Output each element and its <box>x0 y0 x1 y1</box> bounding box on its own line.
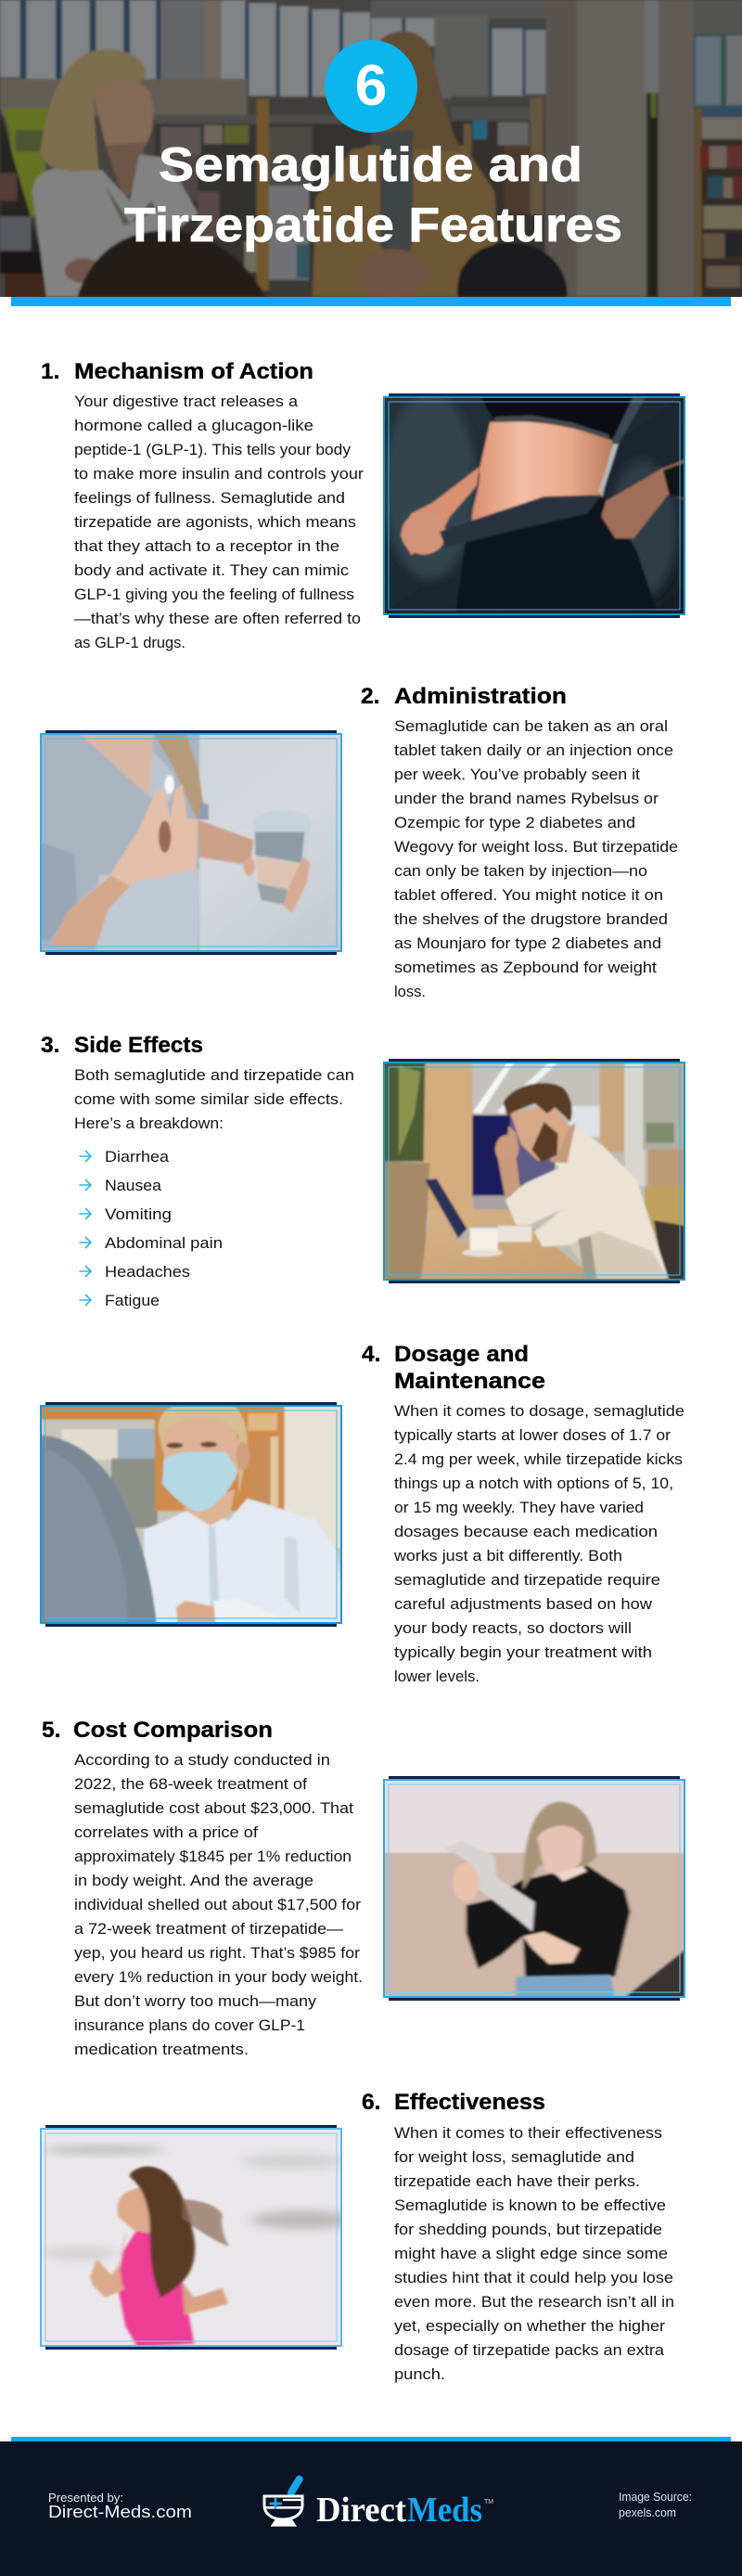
title: Tirzepatide Features <box>124 199 622 252</box>
body text 2: loss. <box>394 983 426 1000</box>
footer accent bar <box>11 2437 731 2441</box>
number badge <box>325 40 417 133</box>
body text 5: approximately $1845 per 1% reduction <box>74 1848 352 1865</box>
body text 4: careful adjustments based on how <box>394 1595 653 1613</box>
body text 5: individual shelled out about $17,500 for <box>74 1896 361 1913</box>
body text 1 <box>74 393 364 651</box>
icon: mortar and pestle logo <box>264 2479 302 2527</box>
body text 3: come with some similar side effects. <box>74 1090 343 1108</box>
heading 6: 6. <box>362 2090 380 2115</box>
photo frame: waist <box>380 393 689 619</box>
body text 6: tirzepatide each have their perks. <box>394 2172 640 2190</box>
body text 1: body and activate it. They can mimic <box>74 561 350 579</box>
heading 4: Maintenance <box>394 1369 545 1394</box>
body text 6: When it comes to their effectiveness <box>394 2124 662 2142</box>
body text 4: semaglutide and tirzepatide require <box>394 1571 660 1589</box>
body text 2: tablet taken daily or an injection once <box>394 741 673 759</box>
bullet list of side effects: Nausea <box>105 1177 162 1194</box>
bullet list of side effects: Abdominal pain <box>105 1234 223 1252</box>
heading 4 <box>362 1342 545 1394</box>
heading 5: 5. <box>42 1718 60 1743</box>
body text 2: sometimes as Zepbound for weight <box>394 959 657 976</box>
heading 3: 3. <box>41 1033 59 1058</box>
body text 6: yet, especially on whether the higher <box>394 2317 665 2335</box>
presented by <box>48 2491 192 2521</box>
body text 5: But don’t worry too much—many <box>74 1992 317 2010</box>
heading 4: 4. <box>362 1342 380 1367</box>
arrow icons <box>80 1151 91 1305</box>
body text 5: semaglutide cost about $23,000. That <box>74 1799 353 1817</box>
body text 5: insurance plans do cover GLP-1 <box>74 2016 305 2034</box>
heading 5: Cost Comparison <box>73 1718 273 1743</box>
body text 2: tablet offered. You might notice it on <box>394 886 663 904</box>
body text 1: hormone called a glucagon-like <box>74 417 313 434</box>
bullet list of side effects: Fatigue <box>105 1292 160 1309</box>
body text 4: or 15 mg weekly. They have varied <box>394 1499 644 1516</box>
body text 4: typically begin your treatment with <box>394 1643 652 1661</box>
body text 6: for shedding pounds, but tirzepatide <box>394 2221 662 2238</box>
bullet list of side effects <box>80 1148 223 1309</box>
photo frame: man with headache <box>380 1059 691 1285</box>
body text 1: Your digestive tract releases a <box>74 393 299 410</box>
body text 4: your body reacts, so doctors will <box>394 1619 632 1637</box>
hero banner photo <box>0 0 742 299</box>
bullet list of side effects: Headaches <box>105 1263 190 1281</box>
body text 3: Here’s a breakdown: <box>74 1114 224 1132</box>
heading 1: Mechanism of Action <box>74 359 313 384</box>
body text 2: the shelves of the drugstore branded <box>394 910 668 928</box>
body text 4: When it comes to dosage, semaglutide <box>394 1402 684 1420</box>
image source: pexels.com <box>619 2506 676 2519</box>
image source <box>619 2491 692 2519</box>
logo wordmark: Meds <box>407 2491 482 2530</box>
body text 6 <box>394 2124 674 2383</box>
title: Semaglutide and <box>159 138 582 192</box>
bullet list of side effects: Diarrhea <box>105 1148 170 1166</box>
section 3: side effects <box>41 1033 691 1309</box>
heading 4: Dosage and <box>394 1342 529 1367</box>
body text 4: works just a bit differently. Both <box>393 1547 622 1565</box>
body text 2: per week. You’ve probably seen it <box>394 766 640 783</box>
photo frame: woman running <box>33 2119 355 2351</box>
heading 3: Side Effects <box>74 1033 203 1058</box>
body text 5: According to a study conducted in <box>74 1751 330 1769</box>
image source: Image Source: <box>619 2491 692 2504</box>
body text 4: things up a notch with options of 5, 10, <box>394 1475 673 1492</box>
body text 2: Ozempic for type 2 diabetes and <box>394 814 635 831</box>
heading 2: Administration <box>394 684 567 709</box>
presented by: Direct-Meds.com <box>48 2503 192 2521</box>
body text 4: lower levels. <box>394 1668 480 1685</box>
heading 1: 1. <box>41 359 59 384</box>
body text 2: can only be taken by injection—no <box>394 862 647 880</box>
bullet list of side effects: Vomiting <box>105 1205 172 1223</box>
body text 6: punch. <box>394 2365 445 2383</box>
body text 6: dosage of tirzepatide packs an extra <box>394 2341 665 2359</box>
body text 6: even more. But the research isn’t all in <box>394 2293 674 2311</box>
body text 5: medication treatments. <box>74 2041 249 2058</box>
heading 6: Effectiveness <box>394 2090 545 2115</box>
body text 5: 2022, the 68-week treatment of <box>74 1775 307 1793</box>
section 2: administration <box>37 684 678 1000</box>
title <box>124 138 622 252</box>
body text 1: feelings of fullness. Semaglutide and <box>74 489 345 507</box>
heading 2: 2. <box>361 684 379 709</box>
top accent bar <box>11 297 731 306</box>
body text 6: for weight loss, semaglutide and <box>394 2148 634 2166</box>
body text 5: yep, you heard us right. That’s $985 for <box>74 1944 360 1962</box>
body text 2: Wegovy for weight loss. But tirzepatide <box>394 838 678 856</box>
body text 6: Semaglutide is known to be effective <box>394 2196 666 2214</box>
logo wordmark: Direct <box>316 2491 406 2530</box>
presented by: Presented by: <box>48 2491 123 2505</box>
body text 1: —that’s why these are often referred to <box>74 610 361 627</box>
body text 2: as Mounjaro for type 2 diabetes and <box>394 934 661 952</box>
body text 3: Both semaglutide and tirzepatide can <box>74 1066 354 1084</box>
photo frame: woman reading bill <box>378 1775 691 2001</box>
logo wordmark: TM <box>484 2499 493 2505</box>
body text 3 <box>74 1066 354 1132</box>
body text 5: correlates with a price of <box>74 1823 258 1841</box>
body text 6: might have a slight edge since some <box>394 2245 668 2262</box>
body text 1: GLP-1 giving you the feeling of fullness <box>74 586 354 603</box>
body text 4: typically starts at lower doses of 1.7 or <box>394 1426 671 1444</box>
body text 1: to make more insulin and controls your <box>74 465 364 483</box>
body text 5: in body weight. And the average <box>74 1872 313 1889</box>
body text 5: every 1% reduction in your body weight. <box>74 1968 363 1986</box>
photo frame: taking a pill <box>37 730 348 956</box>
body text 2 <box>394 717 678 1000</box>
footer <box>0 2441 742 2576</box>
body text 1: as GLP-1 drugs. <box>74 634 186 651</box>
section 1: mechanism of action <box>41 359 689 651</box>
body text 1: that they attach to a receptor in the <box>74 537 339 555</box>
body text 6: studies hint that it could help you lose <box>394 2269 673 2286</box>
body text 4: dosages because each medication <box>394 1523 658 1540</box>
section 6: effectiveness <box>33 2090 674 2383</box>
body text 2: under the brand names Rybelsus or <box>394 790 659 807</box>
logo wordmark <box>316 2491 493 2530</box>
body text 1: peptide-1 (GLP-1). This tells your body <box>74 441 352 458</box>
section 5: cost comparison <box>42 1718 691 2058</box>
body text 5: a 72-week treatment of tirzepatide— <box>74 1920 343 1938</box>
body text 5 <box>74 1751 363 2058</box>
number badge: 6 <box>355 54 387 118</box>
body text 2: Semaglutide can be taken as an oral <box>394 717 668 735</box>
photo frame: masked doctor <box>37 1402 348 1629</box>
body text 4 <box>393 1402 684 1685</box>
body text 1: tirzepatide are agonists, which means <box>74 513 356 531</box>
body text 4: 2.4 mg per week, while tirzepatide kicks <box>394 1450 683 1468</box>
section 4: dosage and maintenance <box>37 1342 684 1685</box>
